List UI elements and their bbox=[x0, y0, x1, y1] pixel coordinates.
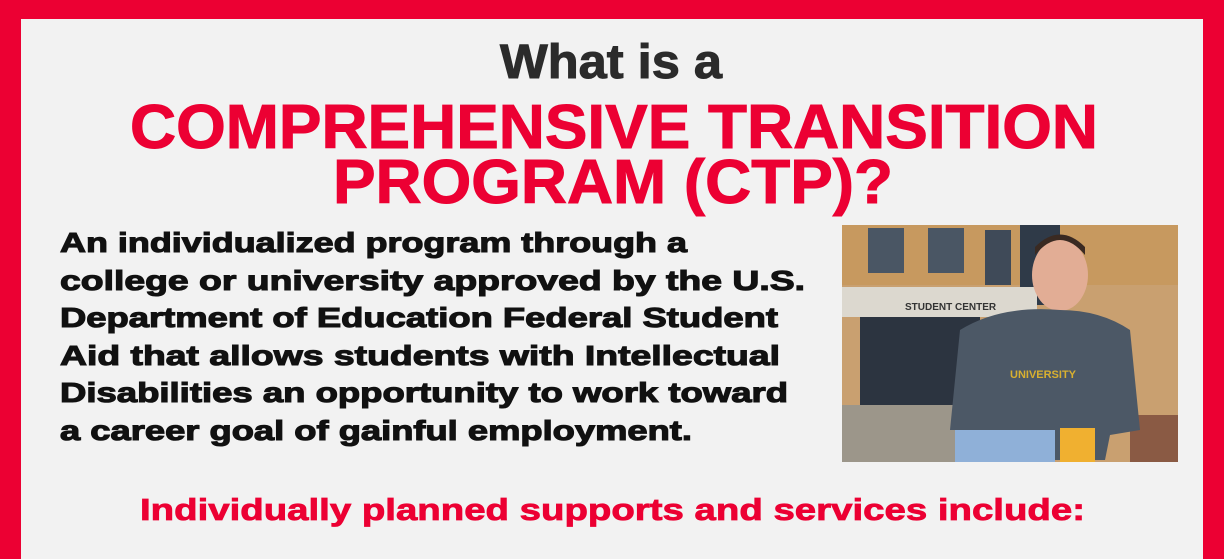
title: main heading: COMPREHENSIVE TRANSITION bbox=[130, 93, 1098, 162]
text block: definition: Disabilities an opportunity to work toward bbox=[60, 377, 788, 408]
title: main heading: PROGRAM (CTP)? bbox=[333, 148, 893, 217]
text block: definition: Aid that allows students with Intellectual bbox=[60, 340, 780, 371]
photo: student at student center bbox=[842, 225, 1178, 462]
text block: definition: An individualized program through a bbox=[60, 227, 688, 258]
title: main heading bbox=[130, 93, 1098, 217]
text block: definition bbox=[60, 227, 805, 446]
text block: definition: a career goal of gainful employment. bbox=[60, 415, 692, 446]
text block: definition: college or university approved by the U.S. bbox=[60, 265, 805, 296]
title: what is a: What is a bbox=[500, 36, 722, 89]
photo: student at student center: UNIVERSITY bbox=[1010, 369, 1077, 381]
text block: definition: Department of Education Federal Student bbox=[60, 302, 778, 333]
subheading: supports and services: Individually planned supports and services include: bbox=[140, 492, 1085, 527]
photo: student at student center: STUDENT CENTER bbox=[905, 302, 997, 313]
